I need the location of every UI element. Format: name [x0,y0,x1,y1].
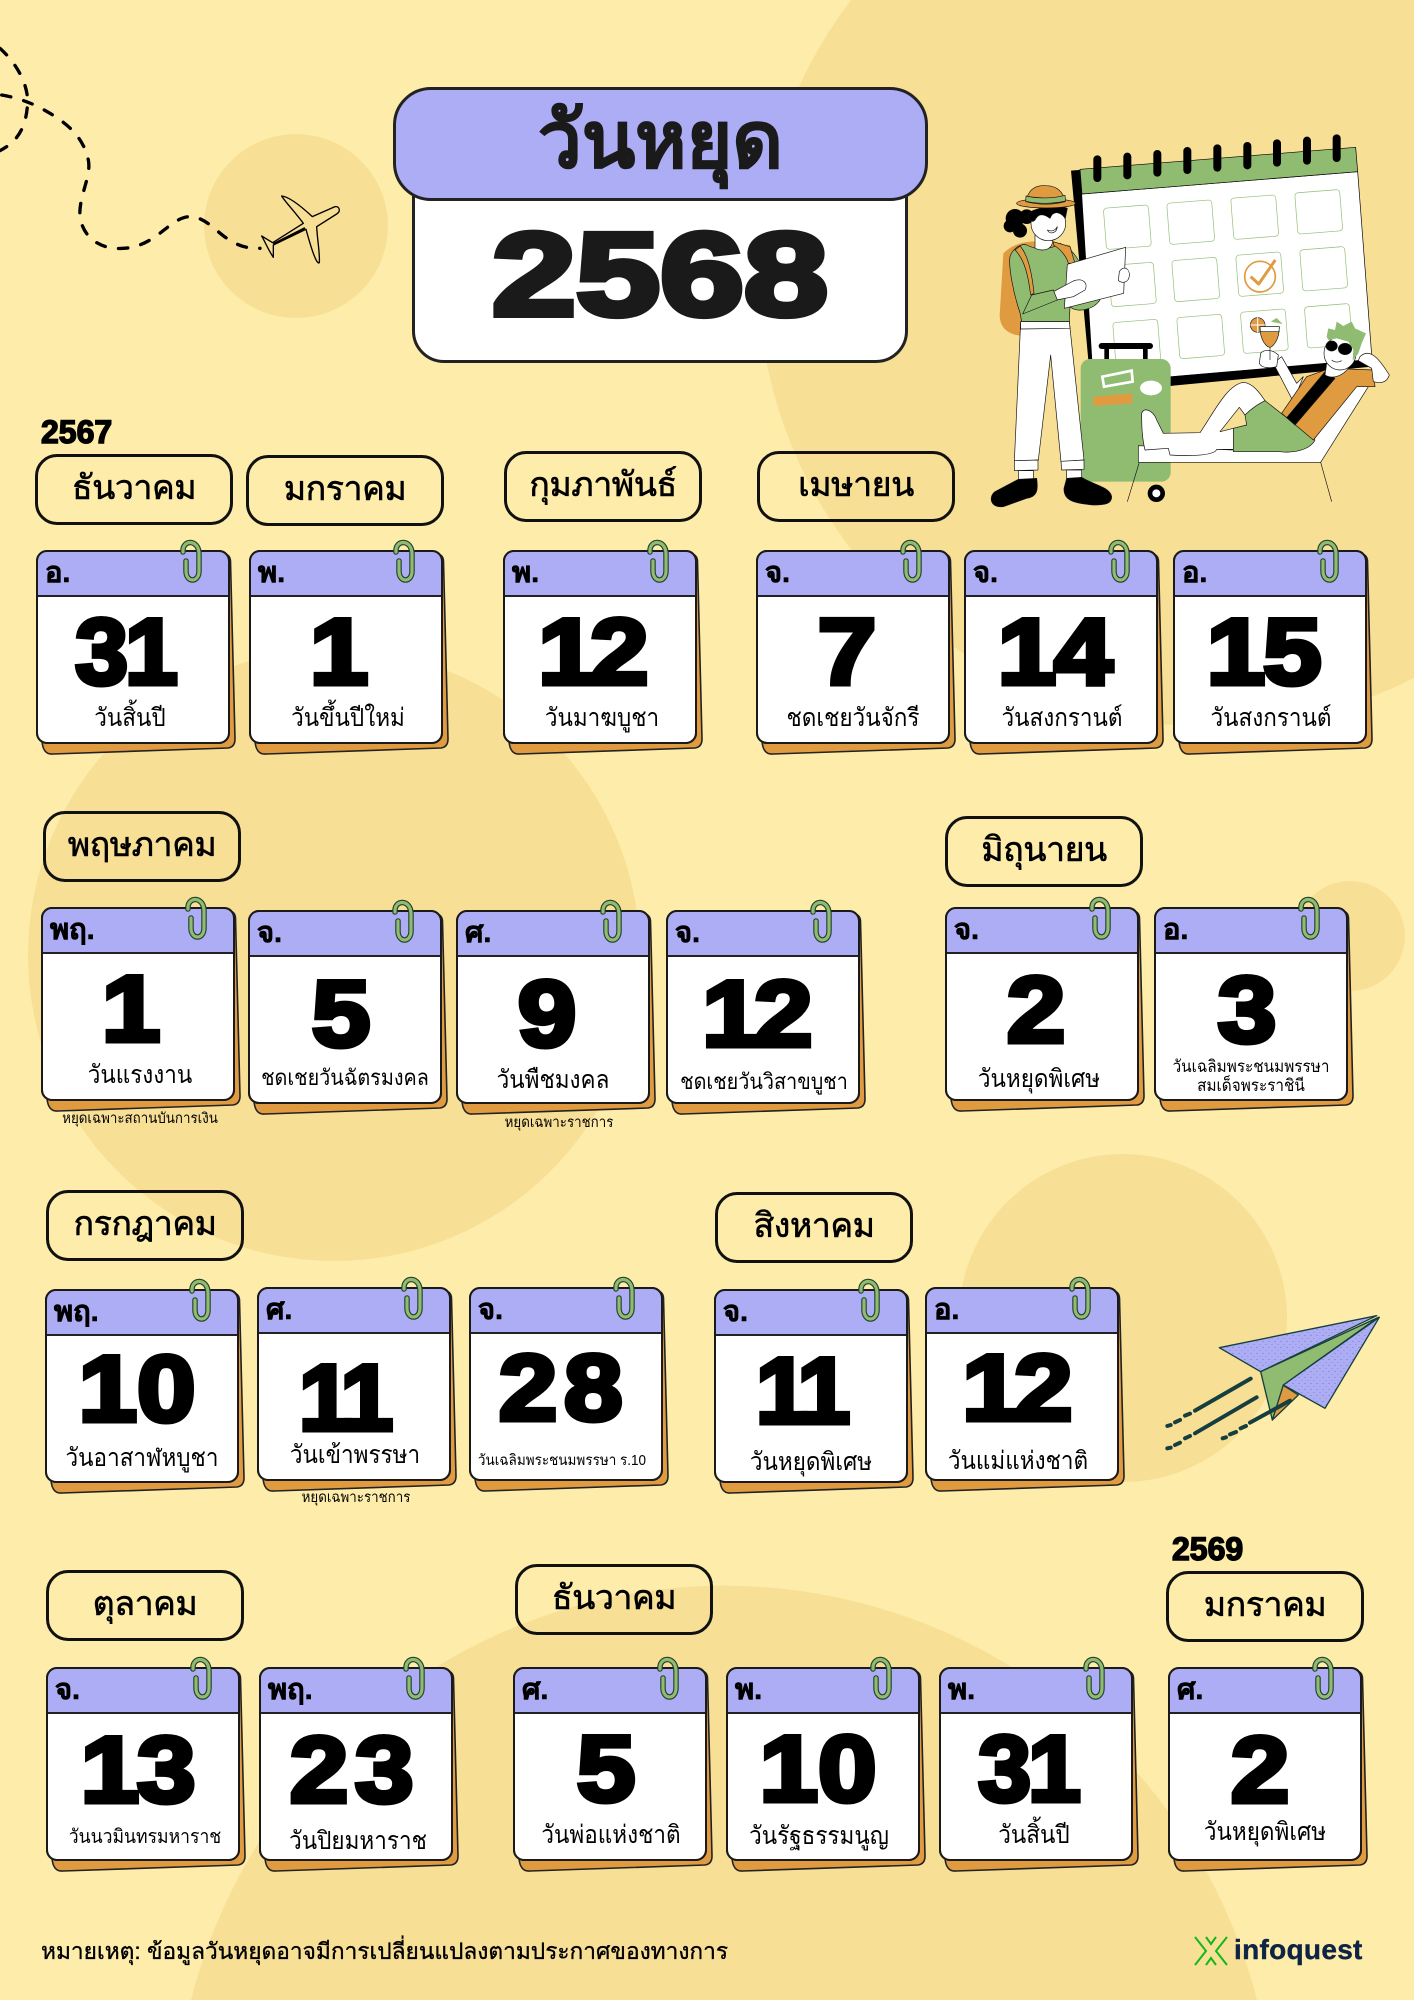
card: 1 May [41,896,241,1112]
card: 3 June: 3 [1218,957,1276,1062]
month: กุมภาพันธ์ [504,451,702,522]
card: 12 February: วันมาฆบูชา [545,704,659,732]
card: 10 December: พ. [735,1674,762,1706]
card: 1 January: พ. [258,557,285,589]
card: 2 January 2569: ศ. [1177,1674,1203,1706]
card: 15 April: 15 [1207,599,1319,704]
card: 5 December: วันพ่อแห่งชาติ [541,1821,681,1849]
card: 5 December [513,1656,713,1872]
month: ธันวาคม: ธันวาคม [552,1579,676,1617]
card: 23 October: พฤ. [268,1674,313,1706]
year label 2567: 2567 [41,414,112,450]
card: 14 April [964,540,1164,755]
calendar [1071,138,1372,397]
card: 31 December: วันสิ้นปี [998,1821,1070,1849]
month: มิถุนายน: มิถุนายน [981,831,1107,869]
card: 13 October [46,1656,246,1872]
month: กุมภาพันธ์: กุมภาพันธ์ [529,466,677,504]
card: 13 October: จ. [55,1674,80,1706]
card: 1 May: 1 [102,956,160,1061]
month: มกราคม: มกราคม [284,470,406,508]
month: มิถุนายน [945,816,1143,887]
card: 10 July: พฤ. [54,1296,99,1328]
card: 28 July: จ. [478,1294,503,1326]
card: 3 June: วันเฉลิมพระชนมพรรษา [1173,1057,1329,1076]
card: 3 June [1154,896,1354,1112]
note: government only: หยุดเฉพาะราชการ [302,1490,410,1506]
card: 12 August: อ. [934,1294,959,1326]
card: 11 July: วันเข้าพรรษา [290,1441,420,1469]
suitcase [1081,346,1171,500]
card: 9 May: 9 [518,961,576,1066]
card: 12 May: 12 [702,961,806,1066]
card: 12 August: วันแม่แห่งชาติ [948,1447,1088,1475]
man in lounge chair with drink [1127,318,1389,502]
illustration: travellers and calendar [990,134,1390,508]
month: มกราคม 2569 [1166,1571,1364,1642]
card: 1 January: 1 [310,599,368,704]
card: 14 April: 14 [998,599,1110,704]
card: 31 December: 31 [75,599,175,704]
card: 11 July: ศ. [266,1294,292,1326]
card: 10 December: 10 [759,1716,877,1821]
card: 5 May [248,900,448,1115]
card: 31 December: 31 [978,1716,1078,1821]
card: 5 December: 5 [577,1716,635,1821]
card: 31 December: วันสิ้นปี [94,704,166,732]
card: 11 August: 11 [756,1338,844,1443]
card: 28 July [469,1276,669,1492]
card: 31 December [939,1656,1139,1872]
card: 12 February: 12 [538,599,642,704]
card: 3 June: อ. [1163,914,1188,946]
month: กรกฎาคม [46,1190,244,1261]
card: 11 July: 11 [299,1345,387,1450]
month: มกราคม [246,455,444,526]
card: 1 January [249,540,449,755]
card: 3 June: สมเด็จพระราชินี [1197,1076,1305,1095]
footnote: หมายเหตุ: ข้อมูลวันหยุดอาจมีการเปลี่ยนแปลงตามประกาศของทางการ [41,1938,728,1964]
card: 7 April: 7 [818,599,876,704]
card: 28 July: 28 [499,1335,629,1440]
card: 31 December: พ. [948,1674,975,1706]
logo: infoquest [1194,1934,1363,1966]
card: 15 April [1173,540,1373,755]
card: 9 May [456,900,656,1115]
card: 10 July: วันอาสาฬหบูชา [66,1444,218,1472]
card: 14 April: จ. [973,557,998,589]
card: 12 May [666,900,866,1115]
card: 2 June: 2 [1007,957,1065,1062]
card: 5 December: ศ. [522,1674,548,1706]
month: พฤษภาคม: พฤษภาคม [68,826,216,864]
month: ตุลาคม: ตุลาคม [93,1585,197,1623]
card: 13 October: วันนวมินทรมหาราช [69,1826,221,1848]
card: 2 June: จ. [954,914,979,946]
card: 10 December [726,1656,926,1872]
card: 5 May: ชดเชยวันฉัตรมงคล [261,1065,429,1090]
year label 2569: 2569 [1172,1531,1243,1567]
card: 2 January 2569: วันหยุดพิเศษ [1204,1818,1326,1846]
card: 7 April [756,540,956,755]
card: 2 June [945,896,1145,1112]
card: 11 August: วันหยุดพิเศษ [750,1448,872,1476]
card: 7 April: ชดเชยวันจักรี [787,704,919,732]
month: ตุลาคม [46,1570,244,1641]
note: government only: หยุดเฉพาะราชการ [505,1115,613,1131]
month: สิงหาคม: สิงหาคม [753,1207,874,1245]
card: 31 December: อ. [45,557,70,589]
month: เมษายน: เมษายน [798,466,914,504]
card: 12 May: ชดเชยวันวิสาขบูชา [680,1069,848,1094]
card: 13 October: 13 [81,1717,193,1822]
month: ธันวาคม 2567: ธันวาคม [72,469,196,507]
card: 10 July [45,1278,245,1494]
card: 7 April: จ. [765,557,790,589]
card: 9 May: ศ. [465,917,491,949]
month: มกราคม 2569: มกราคม [1204,1586,1326,1624]
card: 12 February: พ. [512,557,539,589]
month: พฤษภาคม [43,811,241,882]
card: 12 August: 12 [962,1335,1066,1440]
card: 1 May: พฤ. [50,914,95,946]
note: financial institutions: หยุดเฉพาะสถานบันการเงิน [62,1111,218,1127]
card: 12 August [925,1276,1125,1492]
card: 1 May: วันแรงงาน [88,1061,192,1089]
card: 10 July: 10 [78,1336,196,1441]
card: 23 October [259,1656,459,1872]
woman with backpack [991,186,1129,507]
title heading: วันหยุด: วันหยุด [538,96,783,184]
card: 11 July [257,1276,457,1492]
month: ธันวาคม [515,1564,713,1635]
month: ธันวาคม 2567 [35,454,233,525]
title number: 2568 [492,209,828,341]
card: 23 October: วันปิยมหาราช [289,1827,427,1855]
card: 2 January 2569: 2 [1231,1717,1289,1822]
month: เมษายน [757,451,955,522]
title panel: 2568 [412,190,908,363]
icon: paper plane [1165,1315,1380,1450]
card: 15 April: อ. [1182,557,1207,589]
card: 9 May: วันพืชมงคล [497,1066,609,1094]
card: 11 August [714,1278,914,1494]
card: 28 July: วันเฉลิมพระชนมพรรษา ร.10 [478,1452,646,1469]
card: 11 August: จ. [723,1296,748,1328]
card: 5 May: จ. [257,917,282,949]
card: 31 December [36,540,236,755]
card: 12 February [503,540,703,755]
month: สิงหาคม [715,1192,913,1263]
card: 12 May: จ. [675,917,700,949]
card: 10 December: วันรัฐธรรมนูญ [749,1822,889,1850]
card: 14 April: วันสงกรานต์ [1001,704,1123,732]
card: 23 October: 23 [290,1717,420,1822]
logo mark [1194,1936,1228,1966]
logo text: infoquest [1234,1934,1363,1965]
icon: dashed flight path and airplane [0,46,340,264]
card: 5 May: 5 [312,961,370,1066]
card: 1 January: วันขึ้นปีใหม่ [291,704,405,732]
month: กรกฎาคม: กรกฎาคม [73,1205,216,1243]
card: 2 June: วันหยุดพิเศษ [978,1065,1100,1093]
title heading: วันหยุด [393,87,928,201]
card: 15 April: วันสงกรานต์ [1210,704,1332,732]
card: 2 January 2569 [1168,1656,1368,1872]
